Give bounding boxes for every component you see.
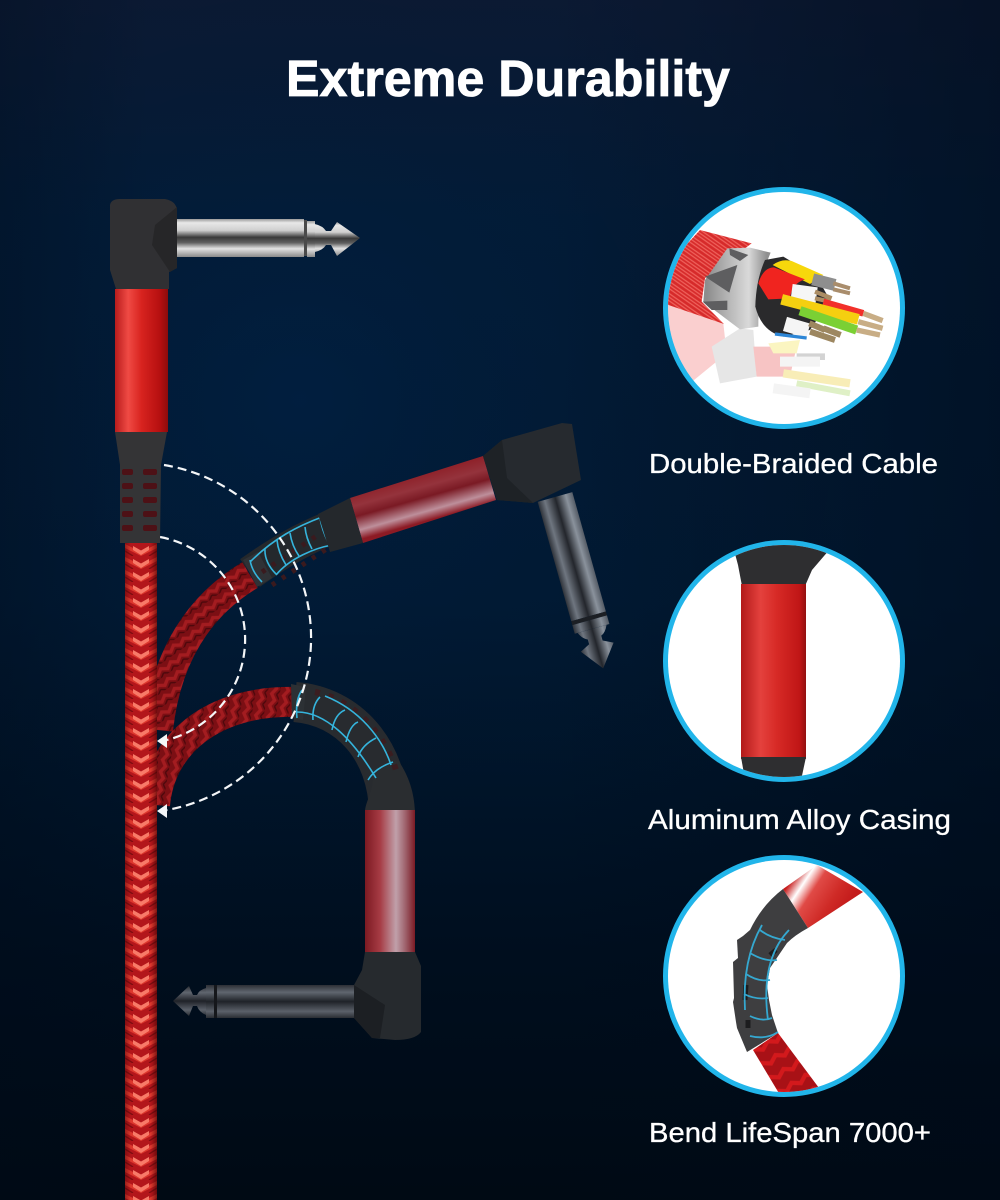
dashed bend arcs with arrows bbox=[160, 465, 311, 810]
title: Extreme Durability bbox=[286, 50, 731, 107]
neck taper from sleeve bbox=[318, 498, 363, 552]
strain relief collar bbox=[115, 432, 167, 543]
upper bent cyan arcs bbox=[250, 517, 332, 582]
relief slots bbox=[122, 469, 157, 531]
yellow thin wire bbox=[782, 299, 858, 319]
plug bbox=[174, 219, 360, 257]
copper cluster bbox=[809, 323, 841, 340]
upper bent strain relief bbox=[250, 520, 352, 573]
copper strands bbox=[857, 313, 883, 335]
lower bent plug bbox=[173, 985, 354, 1018]
red wire bbox=[758, 267, 805, 299]
white wire bbox=[792, 292, 817, 295]
bend cable: upper bent position bbox=[158, 423, 620, 730]
red thin wire bbox=[823, 302, 863, 313]
arrowheads bbox=[157, 734, 167, 818]
lower bent strain relief bbox=[295, 702, 389, 812]
green wire bbox=[800, 311, 857, 330]
label: aluminium casing: Aluminum Alloy Casing bbox=[648, 804, 951, 835]
red tube bbox=[741, 584, 806, 759]
red braid bbox=[663, 230, 752, 324]
cable core bbox=[755, 257, 830, 337]
label: bend lifespan: Bend LifeSpan 7000+ bbox=[649, 1117, 931, 1148]
bottom rubber bbox=[741, 757, 806, 777]
top straight jack bbox=[110, 199, 360, 543]
metal ring bbox=[703, 248, 771, 329]
red tube bbox=[783, 865, 863, 928]
lower bent cyan arcs bbox=[297, 690, 393, 780]
circle: bend lifespan bbox=[663, 855, 905, 1100]
yellow wire bbox=[773, 260, 823, 284]
lower bent right-angle head bbox=[354, 952, 421, 1040]
red aluminium sleeve bbox=[115, 289, 168, 432]
lower bent relief slots bbox=[315, 692, 396, 770]
blue wire bbox=[775, 334, 807, 338]
bend cable: lower bent position bbox=[155, 684, 421, 1040]
upper bent plug bbox=[538, 492, 620, 673]
label: double-braided cable: Double-Braided Cable bbox=[649, 448, 938, 479]
lower bent aluminium sleeve bbox=[365, 810, 415, 953]
white wire 2 bbox=[785, 324, 808, 331]
cyan arcs bbox=[744, 925, 789, 1037]
rubber relief bbox=[733, 889, 808, 1052]
outer arc bbox=[164, 465, 311, 810]
right-angle head bbox=[110, 199, 177, 289]
upper bent right-angle head bbox=[483, 423, 581, 503]
circle: double-braided cable bbox=[663, 187, 905, 429]
inner arc bbox=[160, 537, 245, 740]
lower bent braid bbox=[155, 702, 295, 805]
main straight braided cable bbox=[125, 543, 157, 1200]
braid bbox=[753, 1033, 818, 1092]
upper bent relief slots bbox=[262, 535, 328, 585]
top rubber bbox=[736, 545, 826, 584]
upper bent braid bbox=[158, 575, 250, 730]
grey wire bbox=[813, 279, 835, 285]
relief slots bbox=[745, 950, 776, 1028]
circle: aluminium casing bbox=[663, 535, 905, 785]
reflection bbox=[663, 303, 850, 393]
upper bent aluminium sleeve bbox=[350, 456, 496, 543]
